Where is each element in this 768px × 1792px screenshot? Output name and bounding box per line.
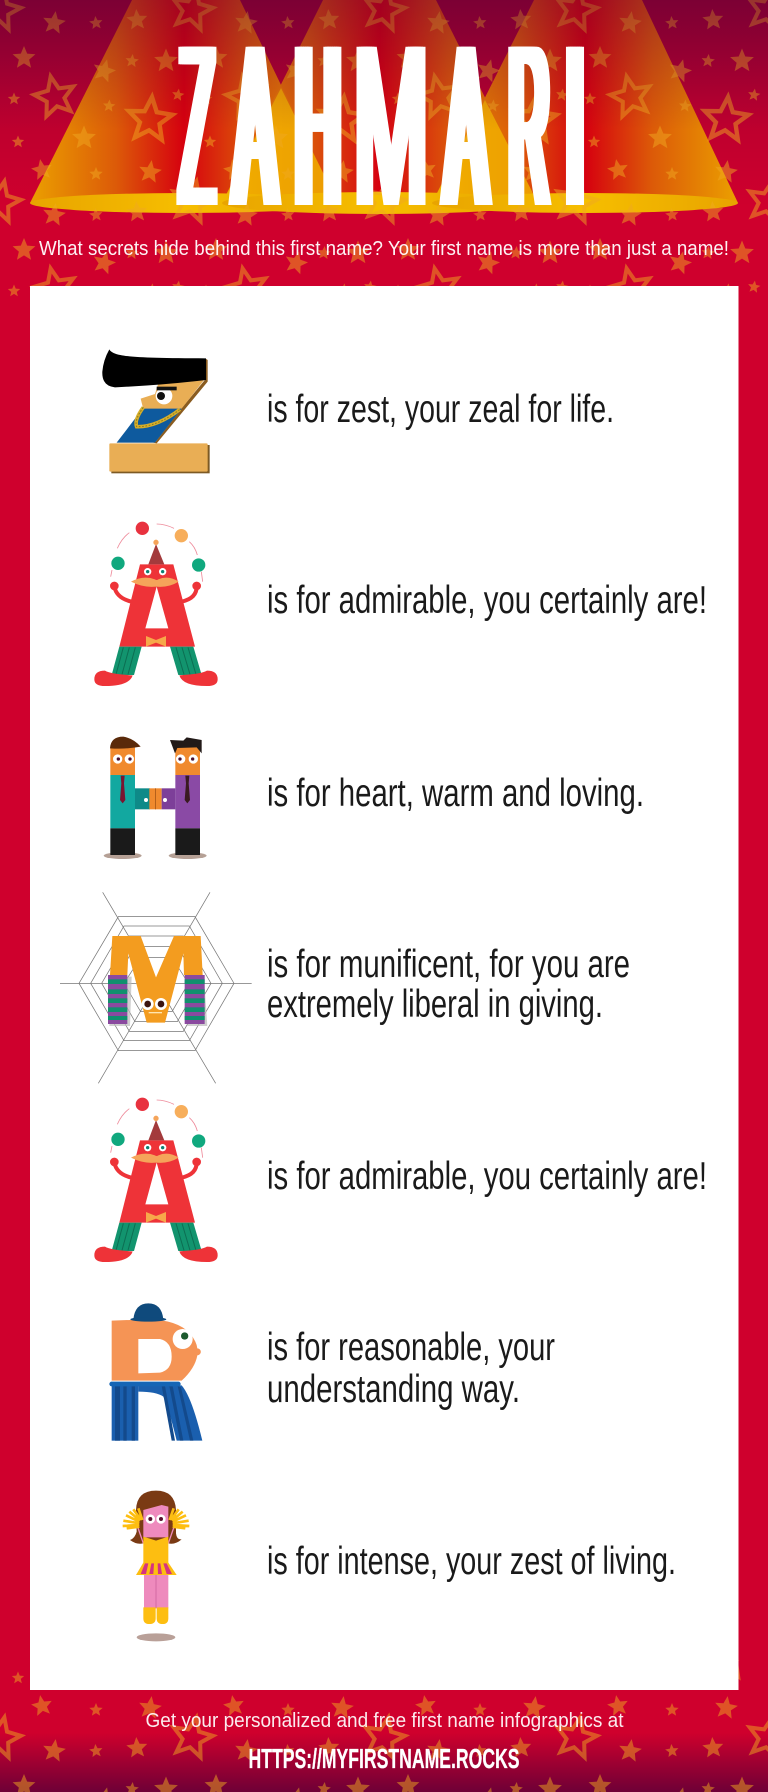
text: M row: is for munificent, for you are [267, 943, 630, 986]
icon: letter R character [109, 1303, 202, 1441]
icon: letter A juggler [94, 522, 218, 686]
title [176, 0, 584, 254]
text: H row: is for heart, warm and loving. [267, 772, 644, 815]
icon: letter Z character [102, 349, 210, 473]
text: R row [267, 1326, 555, 1411]
title: I [566, 0, 583, 254]
icon: letter I cheerleader [123, 1491, 189, 1641]
icon: second letter A juggler [94, 1098, 218, 1262]
title: A [234, 0, 276, 254]
footer prompt: Get your personalized and free first name infographics at [146, 1710, 624, 1732]
footer link: HTTPS://MYFIRSTNAME.ROCKS [248, 1743, 520, 1774]
text: M row: extremely liberal in giving. [267, 983, 603, 1026]
icon: letter M spider web [60, 892, 252, 1083]
text: M row [267, 943, 630, 1026]
text: R row: is for reasonable, your [267, 1326, 555, 1369]
title: H [295, 0, 340, 254]
text: Z row: is for zest, your zeal for life. [267, 388, 614, 431]
title: R [509, 0, 549, 254]
title: Z [180, 0, 214, 254]
icon: letter H two men [104, 737, 207, 859]
title: A [445, 0, 487, 254]
title: M [353, 0, 428, 254]
text: R row: understanding way. [267, 1368, 520, 1411]
panel: white card [30, 286, 738, 1690]
